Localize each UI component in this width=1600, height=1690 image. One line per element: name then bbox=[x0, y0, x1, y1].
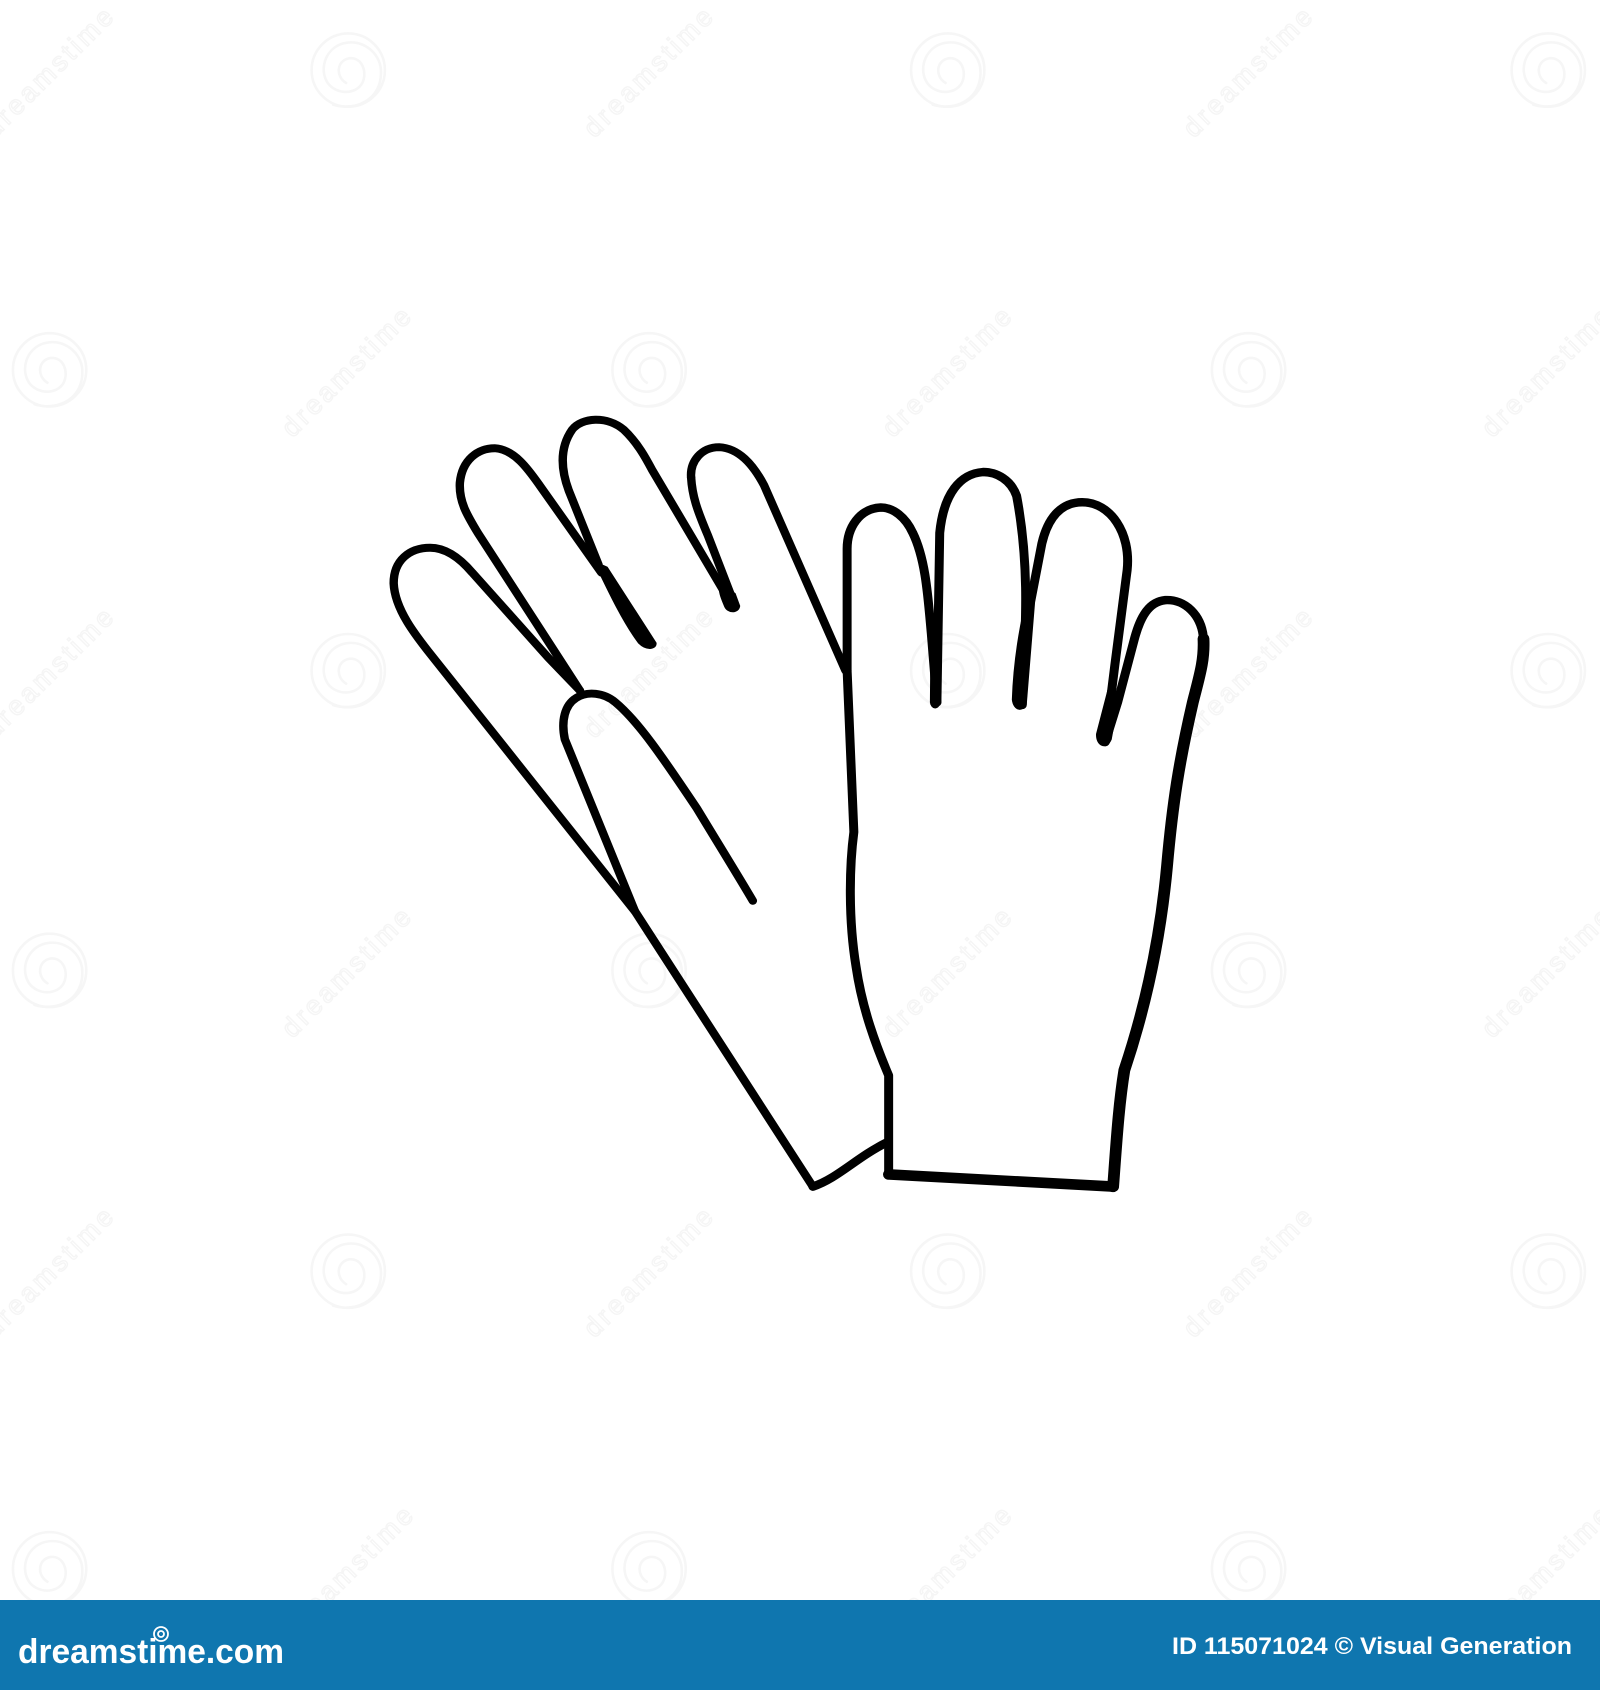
thick crease between fingers two and three bbox=[595, 562, 656, 648]
watermark pattern: dreamstime bbox=[1177, 0, 1320, 143]
watermark pattern: dreamstime bbox=[275, 900, 419, 1043]
watermark pattern: dreamstime bbox=[1177, 600, 1320, 744]
watermark pattern: dreamstime bbox=[577, 1200, 721, 1343]
image credit: ID 115071024 © Visual Generation bbox=[1172, 1633, 1572, 1660]
thumb of left glove bbox=[563, 694, 753, 911]
thick finger creases bbox=[1013, 594, 1032, 709]
right glove outline bbox=[847, 472, 1204, 1187]
left glove outline bbox=[394, 420, 886, 1187]
footer banner bbox=[0, 1600, 1600, 1690]
watermark pattern: dreamstime bbox=[876, 1498, 1020, 1642]
watermark pattern: dreamstime bbox=[278, 1498, 421, 1642]
watermark pattern: dreamstime bbox=[876, 299, 1020, 443]
icon: logo spiral bbox=[154, 1627, 168, 1641]
watermark pattern: dreamstime bbox=[577, 0, 721, 143]
watermark pattern: dreamstime bbox=[876, 900, 1020, 1043]
logo: dreamstime.com: dreamstime.com bbox=[18, 1633, 284, 1671]
watermark pattern: dreamstime bbox=[577, 600, 721, 744]
watermark pattern: dreamstime bbox=[275, 299, 419, 443]
icon: pair of gloves bbox=[394, 420, 1204, 1187]
watermark pattern: dreamstime bbox=[1177, 1200, 1320, 1343]
